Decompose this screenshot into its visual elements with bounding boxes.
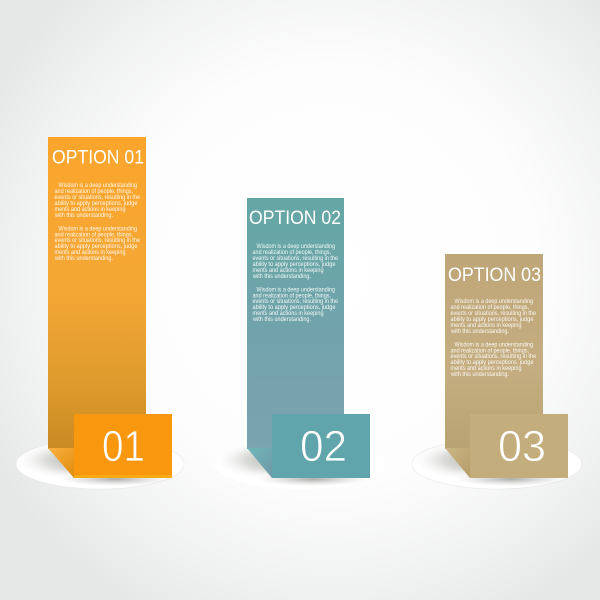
text block 01: Wisdom is a deep understanding (58, 183, 137, 189)
number 02: 02 (300, 422, 347, 471)
text block 01: events or situations, resulting in the (54, 195, 141, 201)
text block 01: ability to apply perceptions, judge (54, 244, 138, 250)
text block 01: ments and actions in keeping (54, 207, 126, 213)
text block 03: with this understanding. (450, 329, 509, 335)
text block 02: with this understanding. (252, 274, 311, 280)
ribbon 01 (48, 137, 146, 449)
text block 02: ments and actions in keeping (252, 268, 324, 274)
text block 03: and realization of people, things, (450, 348, 529, 354)
text block 02 (252, 244, 339, 323)
ribbon 03 (445, 254, 543, 449)
fold 03 (445, 448, 470, 478)
heading 02: OPTION 02 (249, 207, 341, 229)
text block 01: with this understanding. (54, 256, 113, 262)
text block 01: with this understanding. (54, 213, 113, 219)
text block 02: ability to apply perceptions, judge (252, 305, 336, 311)
text block 03: ability to apply perceptions, judge (450, 360, 534, 366)
heading 01: OPTION 01 (52, 146, 144, 168)
text block 02: events or situations, resulting in the (252, 299, 339, 305)
number box 03 (470, 414, 568, 478)
fold 01 (48, 448, 74, 478)
text block 03: ability to apply perceptions, judge (450, 317, 534, 323)
number box 02 (272, 414, 370, 478)
text block 03: Wisdom is a deep understanding (454, 299, 533, 305)
ribbon 02 (247, 198, 344, 449)
text block 03 (450, 299, 537, 378)
text block 03: Wisdom is a deep understanding (454, 342, 533, 348)
panel: option 02 (215, 198, 385, 489)
text block 01: and realization of people, things, (54, 232, 133, 238)
shadow dish 03 (412, 439, 582, 489)
text block 02: with this understanding. (252, 317, 311, 323)
number 01: 01 (102, 422, 145, 471)
text block 02: Wisdom is a deep understanding (256, 287, 335, 293)
text block 03: events or situations, resulting in the (450, 354, 537, 360)
heading 03: OPTION 03 (448, 264, 541, 286)
text block 02: events or situations, resulting in the (252, 256, 339, 262)
text block 02: ments and actions in keeping (252, 311, 324, 317)
text block 02: and realization of people, things, (252, 293, 331, 299)
text block 01 (54, 183, 141, 262)
shadow dish 02 (215, 439, 385, 489)
text block 01: and realization of people, things, (54, 189, 133, 195)
text block 01: events or situations, resulting in the (54, 238, 141, 244)
number box 01 (74, 414, 172, 478)
number 03: 03 (498, 422, 546, 471)
text block 02: and realization of people, things, (252, 250, 331, 256)
shadow dish 01 (16, 439, 184, 489)
text block 01: Wisdom is a deep understanding (58, 226, 137, 232)
text block 01: ments and actions in keeping (54, 250, 126, 256)
text block 01: ability to apply perceptions, judge (54, 201, 138, 207)
panel: option 03 (412, 254, 582, 489)
text block 03: ments and actions in keeping (450, 323, 522, 329)
text block 03: with this understanding. (450, 372, 509, 378)
text block 03: ments and actions in keeping (450, 366, 522, 372)
text block 02: ability to apply perceptions, judge (252, 262, 336, 268)
text block 02: Wisdom is a deep understanding (256, 244, 335, 250)
panel: option 01 (16, 137, 184, 489)
text block 03: and realization of people, things, (450, 305, 529, 311)
fold 02 (247, 448, 272, 478)
text block 03: events or situations, resulting in the (450, 311, 537, 317)
